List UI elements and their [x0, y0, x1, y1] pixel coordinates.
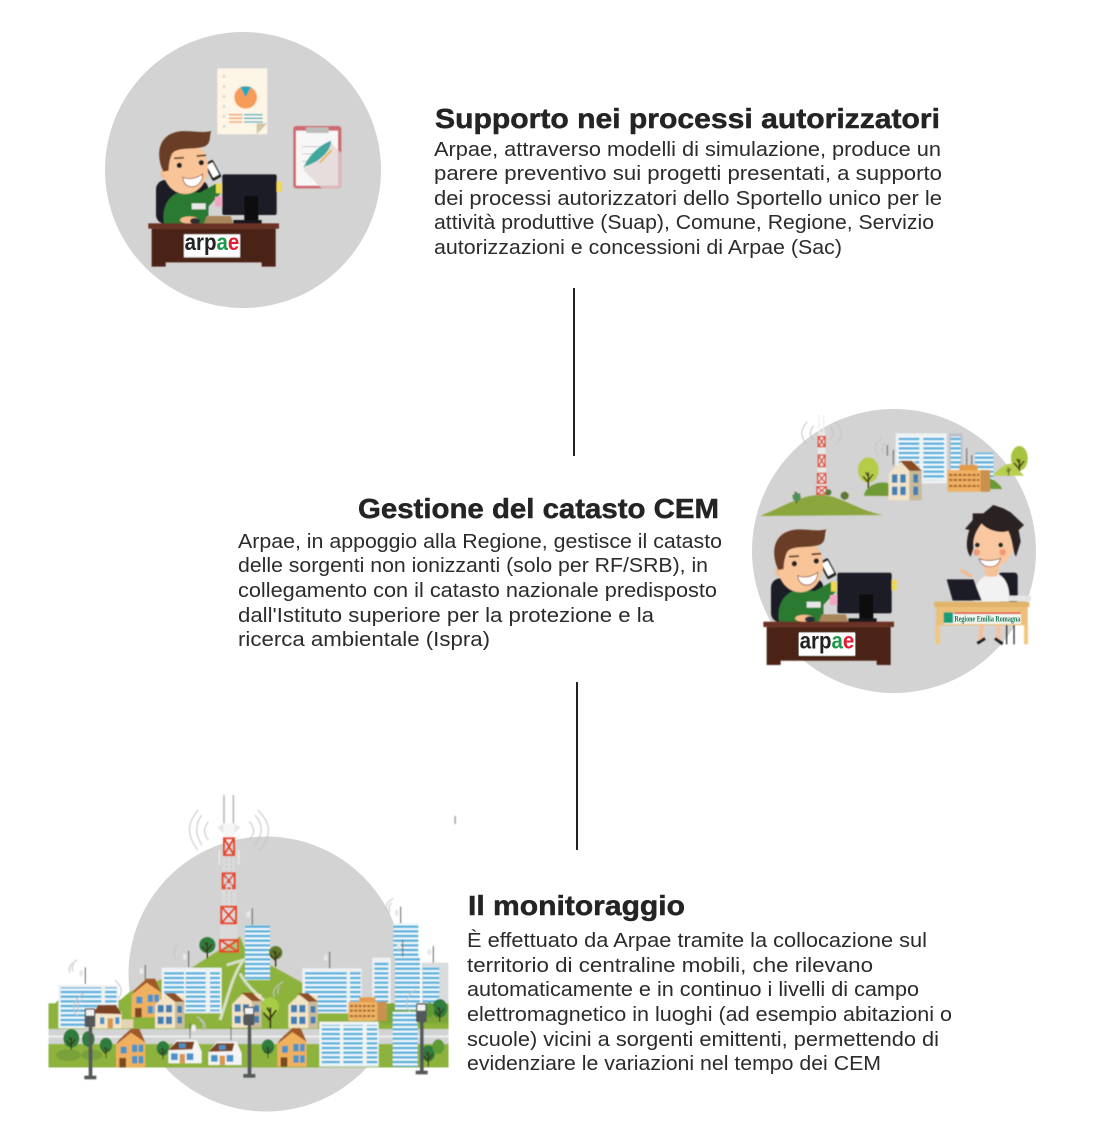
panel: desk illustration circle: [105, 32, 381, 308]
connector line: second to third section: [576, 682, 578, 850]
text block: catasto description: delle sorgenti non ionizzanti (solo per RF/SRB), in: [238, 555, 708, 577]
factory: [348, 1002, 387, 1021]
tower: [219, 823, 238, 952]
text block: monitoraggio description: territorio di centraline mobili, che rilevano: [467, 955, 873, 977]
text block: monitoraggio description: automaticamente e in continuo i livelli di campo: [467, 979, 919, 1001]
illustration: tower, town, employee and regional officer: [760, 415, 1031, 665]
text block: Supporto description: attività produttive (Suap), Comune, Regione, Servizio: [434, 212, 934, 234]
heading: Gestione del catasto CEM: Gestione del catasto CEM: [358, 493, 719, 524]
monitoring stations: [84, 1008, 96, 1079]
illustration: employee at arpae desk with documents: [148, 68, 341, 267]
text block: catasto description: Arpae, in appoggio alla Regione, gestisce il catasto: [238, 531, 722, 553]
grey circle background: [128, 836, 404, 1112]
text block: monitoraggio description: [467, 929, 952, 1075]
text block: Supporto description: parere preventivo sui progetti presentati, a supporto: [434, 163, 942, 185]
text block: catasto description: [238, 531, 722, 651]
heading: Supporto nei processi autorizzatori: Supporto nei processi autorizzatori: [435, 103, 940, 134]
text block: monitoraggio description: evidenziare le variazioni nel tempo dei CEM: [467, 1053, 881, 1075]
text block: monitoraggio description: elettromagnetico in luoghi (ad esempio abitazioni o: [467, 1004, 952, 1026]
heading: Il monitoraggio: Il monitoraggio: [468, 890, 685, 921]
grey circle background: [752, 409, 1036, 693]
buildings back: [58, 985, 118, 1028]
text block: Supporto description: dei processi autorizzatori dello Sportello unico per le: [434, 188, 942, 210]
panel: monitoring illustration circle: [48, 795, 456, 1112]
text block: Supporto description: [434, 139, 942, 259]
connector line: first to second section: [573, 288, 575, 456]
text block: catasto description: dall'Istituto superiore per la protezione e la: [238, 605, 655, 627]
logo: arpae desk sign: arpae: [185, 229, 239, 255]
text block: monitoraggio description: scuole) vicini a sorgenti emittenti, permettendo di: [467, 1029, 939, 1051]
text block: catasto description: collegamento con il catasto nazionale predisposto: [238, 580, 717, 602]
logo: Regione Emilia-Romagna desk sign: Regione Emilia Romagna: [954, 614, 1021, 624]
grey circle background: [105, 32, 381, 308]
logo: arpae desk sign: arpae: [800, 627, 854, 653]
trees: [63, 937, 447, 1061]
houses: [93, 1012, 122, 1028]
text block: Supporto description: autorizzazioni e concessioni di Arpae (Sac): [434, 237, 842, 259]
text block: catasto description: ricerca ambientale (Ispra): [238, 629, 490, 651]
text block: Supporto description: Arpae, attraverso modelli di simulazione, produce un: [434, 139, 941, 161]
text block: monitoraggio description: È effettuato da Arpae tramite la collocazione sul: [467, 929, 927, 952]
panel: catasto illustration circle: [752, 409, 1036, 693]
illustration: city with transmission tower and monitoring stations: [48, 795, 456, 1079]
